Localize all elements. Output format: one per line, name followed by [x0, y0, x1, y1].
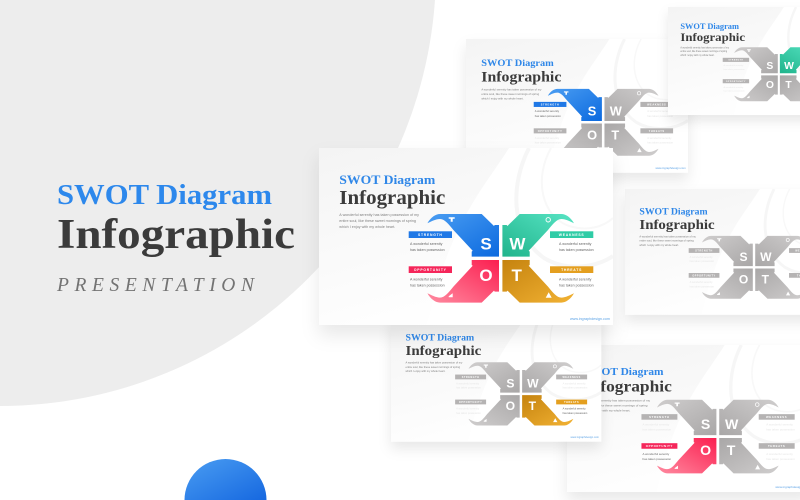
- slide: threats preview, bottom left: A wonderful serenity: [456, 407, 480, 411]
- slide: threats preview, bottom left: has taken possession: [563, 411, 588, 415]
- slide: strength preview, top left: www.ingraphdesign.com: [656, 166, 686, 170]
- quadrant: S: S: [480, 234, 492, 253]
- text: strength: has taken possession: [410, 248, 445, 252]
- text: threats: has taken possession: [559, 284, 594, 288]
- slide: opportunity preview, bottom right: O: [700, 442, 711, 458]
- slide: opportunity preview, bottom right: S: [701, 416, 710, 432]
- slide: threats preview, bottom left: Infographic: [406, 344, 481, 359]
- text: opportunity: has taken possession: [410, 284, 445, 288]
- slide: neutral preview, middle right: W: [760, 250, 772, 264]
- quadrant: T: T: [512, 266, 523, 285]
- slide: opportunity preview, bottom right: A wonderful serenity: [643, 423, 670, 427]
- slide intro text: entire soul, like these sweet mornings of spring: [339, 219, 416, 223]
- slide: weakness preview, top right: W: [784, 61, 794, 72]
- slide: threats preview, bottom left: OPPORTUNITY: [459, 401, 482, 404]
- slide: threats preview, bottom left: O: [506, 399, 515, 413]
- text: weakness: [559, 242, 594, 252]
- slide: neutral preview, middle right: has taken possession: [690, 259, 715, 263]
- slide: strength preview, top left: THREATS: [649, 129, 665, 133]
- label: weakness: WEAKNESS: [559, 233, 584, 237]
- quadrant: T: [502, 260, 574, 303]
- slide: weakness preview, top right: A wonderful serenity has taken possession of my: [680, 46, 730, 49]
- slide: strength preview, top left: [466, 39, 688, 173]
- slide: strength preview, top left: has taken possession: [647, 141, 674, 145]
- slide: opportunity preview, bottom right: STRENGTH: [649, 415, 670, 419]
- slide: opportunity preview, bottom right: Infographic: [584, 378, 672, 395]
- slide: strength preview, top left: Infographic: [481, 69, 562, 85]
- slide: neutral preview, middle right: Infographic: [639, 217, 715, 232]
- slide: weakness preview, top right: entire soul, like these sweet mornings of spring: [680, 50, 728, 53]
- slide: threats preview, bottom left: www.ingraphdesign.com: [570, 435, 600, 439]
- slide: threats preview, bottom left: A wonderful serenity has taken possession of my: [406, 361, 463, 365]
- slide: opportunity preview, bottom right: has taken possession: [766, 457, 795, 461]
- panel: main full-colour SWOT slide: [319, 148, 613, 325]
- label: strength: [409, 231, 452, 238]
- slide: threats preview, bottom left: has taken possession: [456, 411, 481, 415]
- text: weakness: has taken possession: [559, 248, 594, 252]
- slide: neutral preview, middle right: which I enjoy with my whole heart.: [639, 243, 679, 247]
- slide: threats preview, bottom left: T: [529, 399, 537, 413]
- slide: threats preview, bottom left: STRENGTH: [462, 376, 479, 379]
- slide: opportunity preview, bottom right: A wonderful serenity: [643, 452, 670, 456]
- text: strength: A wonderful serenity: [410, 242, 443, 246]
- label: threats: THREATS: [561, 268, 582, 272]
- icon: strength: [449, 217, 455, 222]
- label: strength: STRENGTH: [418, 233, 443, 237]
- quadrant: S: [427, 214, 499, 257]
- slide: threats preview, bottom left: entire soul, like these sweet mornings of spring: [406, 365, 461, 369]
- slide: neutral preview, middle right: [625, 189, 800, 315]
- slide: weakness preview, top right: T: [785, 80, 792, 91]
- slide: weakness preview, top right: S: [766, 61, 773, 72]
- icon: weakness: [546, 218, 550, 222]
- slide: neutral preview, middle right: entire soul, like these sweet mornings of spring: [639, 239, 694, 243]
- slide: threats preview, bottom left: [391, 315, 601, 442]
- slide heading: [339, 172, 446, 209]
- slide: weakness preview, top right: A wonderful serenity: [724, 64, 744, 67]
- slide: threats preview, bottom left: SWOT Diagram: [406, 334, 474, 344]
- slide: strength preview, top left: STRENGTH: [541, 102, 559, 106]
- text: strength: [410, 242, 445, 252]
- slide: opportunity preview, bottom right: entire soul, like these sweet mornings of spring: [584, 403, 648, 407]
- slide: opportunity preview, bottom right: W: [725, 416, 739, 432]
- slide: weakness preview, top right: has taken possession: [724, 89, 745, 92]
- slide: opportunity preview, bottom right: has taken possession: [643, 427, 671, 431]
- slide: neutral preview, middle right: SWOT Diagram: [639, 207, 708, 217]
- slide: opportunity preview, bottom right: [567, 345, 800, 492]
- slide: threats preview, bottom left: W: [527, 376, 539, 390]
- icon: threats: [546, 292, 552, 298]
- quadrant: O: O: [479, 266, 493, 285]
- slide: neutral preview, middle right: S: [740, 250, 748, 264]
- slide: strength preview, top left: S: [588, 103, 597, 118]
- slide intro text: which I enjoy with my whole heart.: [339, 225, 395, 229]
- slide: weakness preview, top right: A wonderful serenity: [724, 86, 744, 89]
- slide: opportunity preview, bottom right: THREATS: [768, 444, 785, 448]
- slide: opportunity preview, bottom right: has taken possession: [766, 427, 795, 431]
- slide: strength preview, top left: T: [611, 127, 619, 142]
- label: weakness: [550, 231, 593, 238]
- text: opportunity: A wonderful serenity: [410, 278, 443, 282]
- slide: strength preview, top left: W: [610, 103, 623, 118]
- quadrant: W: [502, 214, 574, 257]
- slide: strength preview, top left: SWOT Diagram: [481, 58, 554, 69]
- text: opportunity: [410, 278, 445, 288]
- slide: strength preview, top left: which I enjoy with my whole heart.: [481, 96, 524, 100]
- slide: opportunity preview, bottom right: has taken possession: [643, 457, 671, 461]
- slide: threats preview, bottom left: THREATS: [564, 401, 579, 404]
- background: large grey circle: [0, 0, 436, 406]
- slide: threats preview, bottom left: has taken possession: [456, 386, 481, 390]
- SWOT diagram: [427, 214, 574, 303]
- subtitle: Presentation: PRESENTATION: [56, 275, 255, 296]
- slide: neutral preview, middle right: has taken possession: [690, 284, 715, 288]
- title: SWOT Diagram: SWOT Diagram: [57, 179, 272, 211]
- slide: opportunity preview, bottom right: T: [727, 442, 736, 458]
- quadrant: O: [427, 260, 499, 303]
- slide heading: SWOT Diagram: [339, 172, 435, 187]
- slide: neutral preview, middle right: OPPORTUNITY: [692, 274, 716, 277]
- title: Infographic: Infographic: [57, 212, 295, 258]
- slide: weakness preview, top right: [668, 7, 800, 115]
- slide: weakness preview, top right: STRENGTH: [728, 60, 743, 62]
- slide: strength preview, top left: WEAKNESS: [647, 102, 666, 106]
- slide: weakness preview, top right: O: [766, 80, 774, 91]
- slide intro text: A wonderful serenity has taken possession of my: [339, 213, 419, 217]
- slide: threats preview, bottom left: A wonderful serenity: [563, 407, 586, 411]
- slide: neutral preview, middle right: A wonderful serenity: [690, 255, 713, 259]
- slide: opportunity preview, bottom right: OPPORTUNITY: [646, 444, 673, 448]
- slide: weakness preview, top right: has taken possession: [724, 68, 745, 71]
- slide heading: Infographic: [339, 188, 446, 209]
- slide: opportunity preview, bottom right: SWOT Diagram: [584, 366, 664, 378]
- slide: weakness preview, top right: which I enjoy with my whole heart.: [680, 54, 715, 57]
- slide: weakness preview, top right: OPPORTUNITY: [726, 81, 746, 83]
- slide: strength preview, top left: A wonderful serenity: [647, 109, 672, 113]
- label: opportunity: [409, 266, 452, 273]
- slide intro text: [339, 213, 419, 229]
- slide: strength preview, top left: A wonderful serenity: [647, 136, 672, 140]
- slide: strength preview, top left: OPPORTUNITY: [538, 129, 562, 133]
- slide: threats preview, bottom left: which I enjoy with my whole heart.: [406, 369, 446, 373]
- quadrant: W: W: [509, 234, 526, 253]
- slide: threats preview, bottom left: A wonderful serenity: [456, 381, 480, 385]
- slide: strength preview, top left: A wonderful serenity: [535, 109, 560, 113]
- text: threats: A wonderful serenity: [559, 278, 592, 282]
- slide: threats preview, bottom left: A wonderful serenity: [563, 381, 586, 385]
- slide: opportunity preview, bottom right: A wonderful serenity: [766, 423, 793, 427]
- slide: opportunity preview, bottom right: WEAKNESS: [766, 415, 787, 419]
- text: weakness: A wonderful serenity: [559, 242, 592, 246]
- slide: strength preview, top left: entire soul, like these sweet mornings of spring: [481, 92, 540, 96]
- icon: opportunity: [449, 293, 453, 297]
- slide: threats preview, bottom left: S: [506, 376, 514, 390]
- slide: threats preview, bottom left: WEAKNESS: [562, 376, 581, 379]
- slide: opportunity preview, bottom right: A wonderful serenity has taken possession of my: [584, 398, 651, 402]
- label: threats: [550, 266, 593, 273]
- decorative blue circle: [184, 459, 266, 500]
- left heading block: [56, 179, 295, 296]
- slide: strength preview, top left: A wonderful serenity has taken possession of my: [481, 87, 542, 91]
- footer link text: www.ingraphdesign.com: [570, 317, 610, 321]
- slide: strength preview, top left: O: [587, 127, 597, 142]
- slide: neutral preview, middle right: STRENGTH: [695, 249, 713, 252]
- slide: strength preview, top left: A wonderful serenity: [535, 136, 560, 140]
- slide: neutral preview, middle right: O: [739, 272, 748, 286]
- slide: neutral preview, middle right: A wonderful serenity: [690, 280, 713, 284]
- slide: opportunity preview, bottom right: A wonderful serenity: [766, 452, 793, 456]
- slide: opportunity preview, bottom right: which I enjoy with my whole heart.: [584, 408, 630, 412]
- slide: weakness preview, top right: SWOT Diagram: [680, 22, 739, 31]
- text: threats: [559, 278, 594, 288]
- slide: strength preview, top left: has taken possession: [647, 114, 674, 118]
- slide: threats preview, bottom left: has taken possession: [563, 386, 588, 390]
- slide: strength preview, top left: has taken possession: [535, 141, 561, 145]
- slide: neutral preview, middle right: T: [762, 272, 770, 286]
- slide: neutral preview, middle right: A wonderful serenity has taken possession of my: [639, 234, 697, 238]
- label: opportunity: OPPORTUNITY: [414, 268, 447, 272]
- slide: weakness preview, top right: Infographic: [680, 30, 745, 44]
- slide: strength preview, top left: has taken possession: [535, 114, 561, 118]
